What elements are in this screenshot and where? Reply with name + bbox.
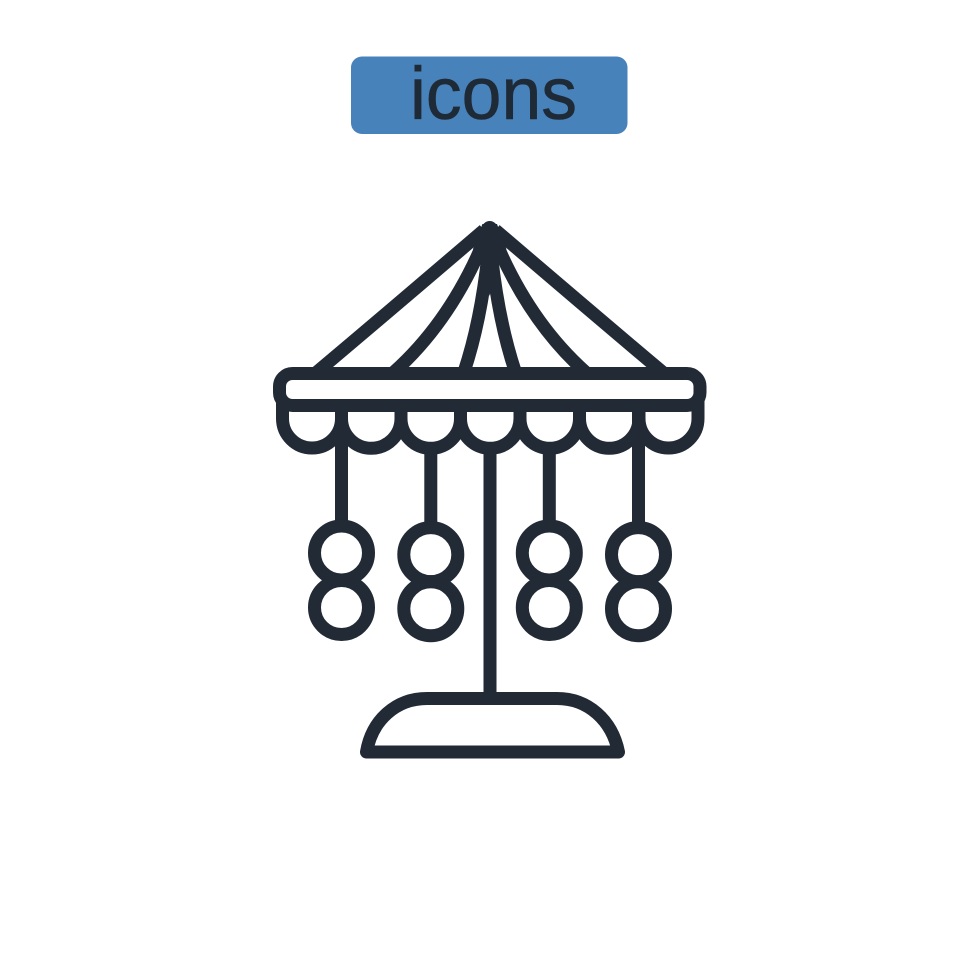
badge: icons label: [351, 52, 628, 135]
hanging seat 4: [612, 412, 666, 636]
hanging seat 1: [314, 412, 368, 634]
hanging seat 3: [522, 445, 576, 634]
canopy rim: [280, 374, 700, 406]
badge: icons label: icons: [410, 52, 577, 135]
hanging seat 2: [404, 445, 458, 636]
scalloped valance: [282, 400, 698, 448]
icon: carousel: [280, 221, 700, 752]
canopy roof: [317, 221, 662, 372]
central pole: [484, 445, 496, 698]
base: [366, 698, 618, 752]
